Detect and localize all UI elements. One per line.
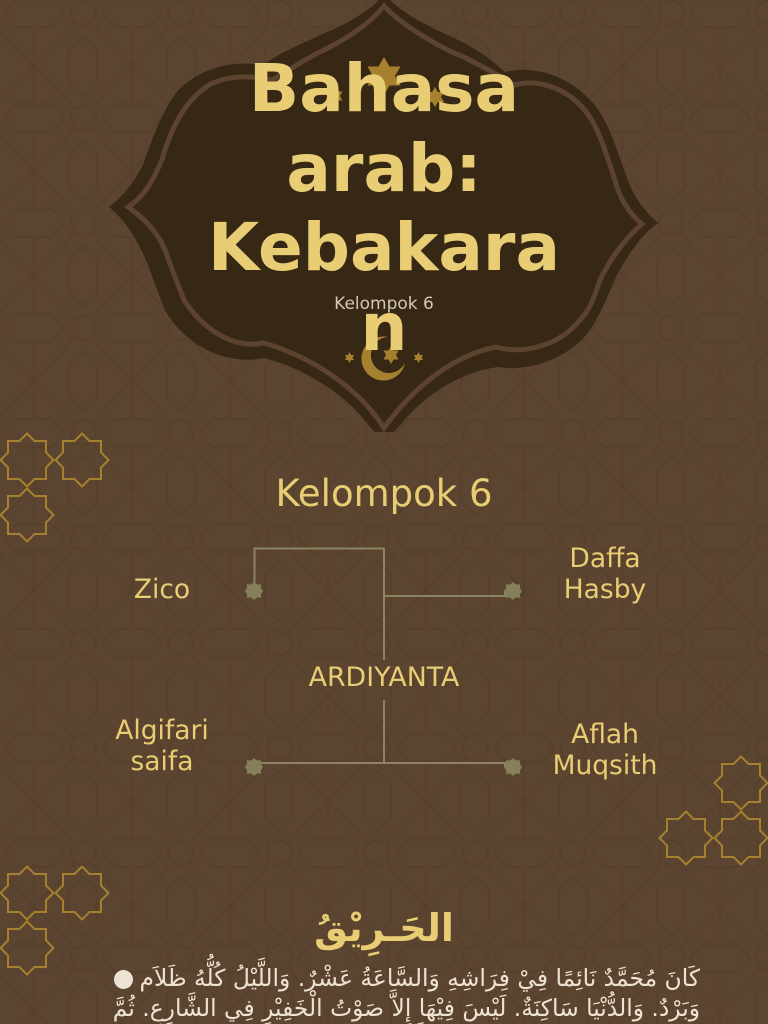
section heading: Kelompok 6: [276, 472, 492, 515]
Arabic heading: الحَـرِيْقُ: [314, 906, 454, 950]
member: Daffa Hasby: [564, 543, 646, 605]
member: Aflah Muqsith: [553, 719, 657, 781]
member: Algifari saifa: saifa: [130, 746, 193, 777]
member: Algifari saifa: Algifari: [115, 715, 209, 746]
bullet: [114, 970, 133, 989]
title: Bahasa: [249, 50, 519, 127]
member: Aflah Muqsith: Muqsith: [553, 750, 657, 781]
icon: top stars: [328, 57, 444, 107]
Arabic body line 1: كَانَ مُحَمَّدٌ نَائِمًا فِيْ فِرَاشِهِ وَالسَّاعَةُ عَشْرٌ. وَاللَّيْلُ كُلُّهُ ظَلاَم: [140, 964, 700, 992]
badge inner outline: [128, 6, 642, 428]
member: Daffa Hasby: Hasby: [564, 574, 646, 605]
title: [208, 50, 560, 366]
badge subtitle: Kelompok 6: [334, 294, 434, 314]
title: Kebakara: [208, 209, 560, 286]
icon: crescent and stars: [345, 337, 423, 381]
member: Zico: Zico: [134, 574, 190, 605]
title: n: [360, 288, 408, 366]
panel: title badge: [109, 0, 658, 432]
member: Aflah Muqsith: Aflah: [571, 719, 639, 750]
badge outer shape: [109, 0, 658, 440]
member: Algifari saifa: [115, 715, 209, 777]
Arabic body line 2: وَبَرْدٌ. وَالدُّنْيَا سَاكِنَةٌ. لَيْسَ فِيْهَا إِلاَّ صَوْتُ الْخَفِيْرِ فِي الشَّارِعِ. ثُمَّ: [113, 994, 700, 1022]
title: arab:: [286, 130, 482, 206]
member: Daffa Hasby: Daffa: [569, 543, 641, 574]
Arabic body line 3: [218, 1023, 700, 1024]
center label: ARDIYANTA: [309, 662, 459, 693]
